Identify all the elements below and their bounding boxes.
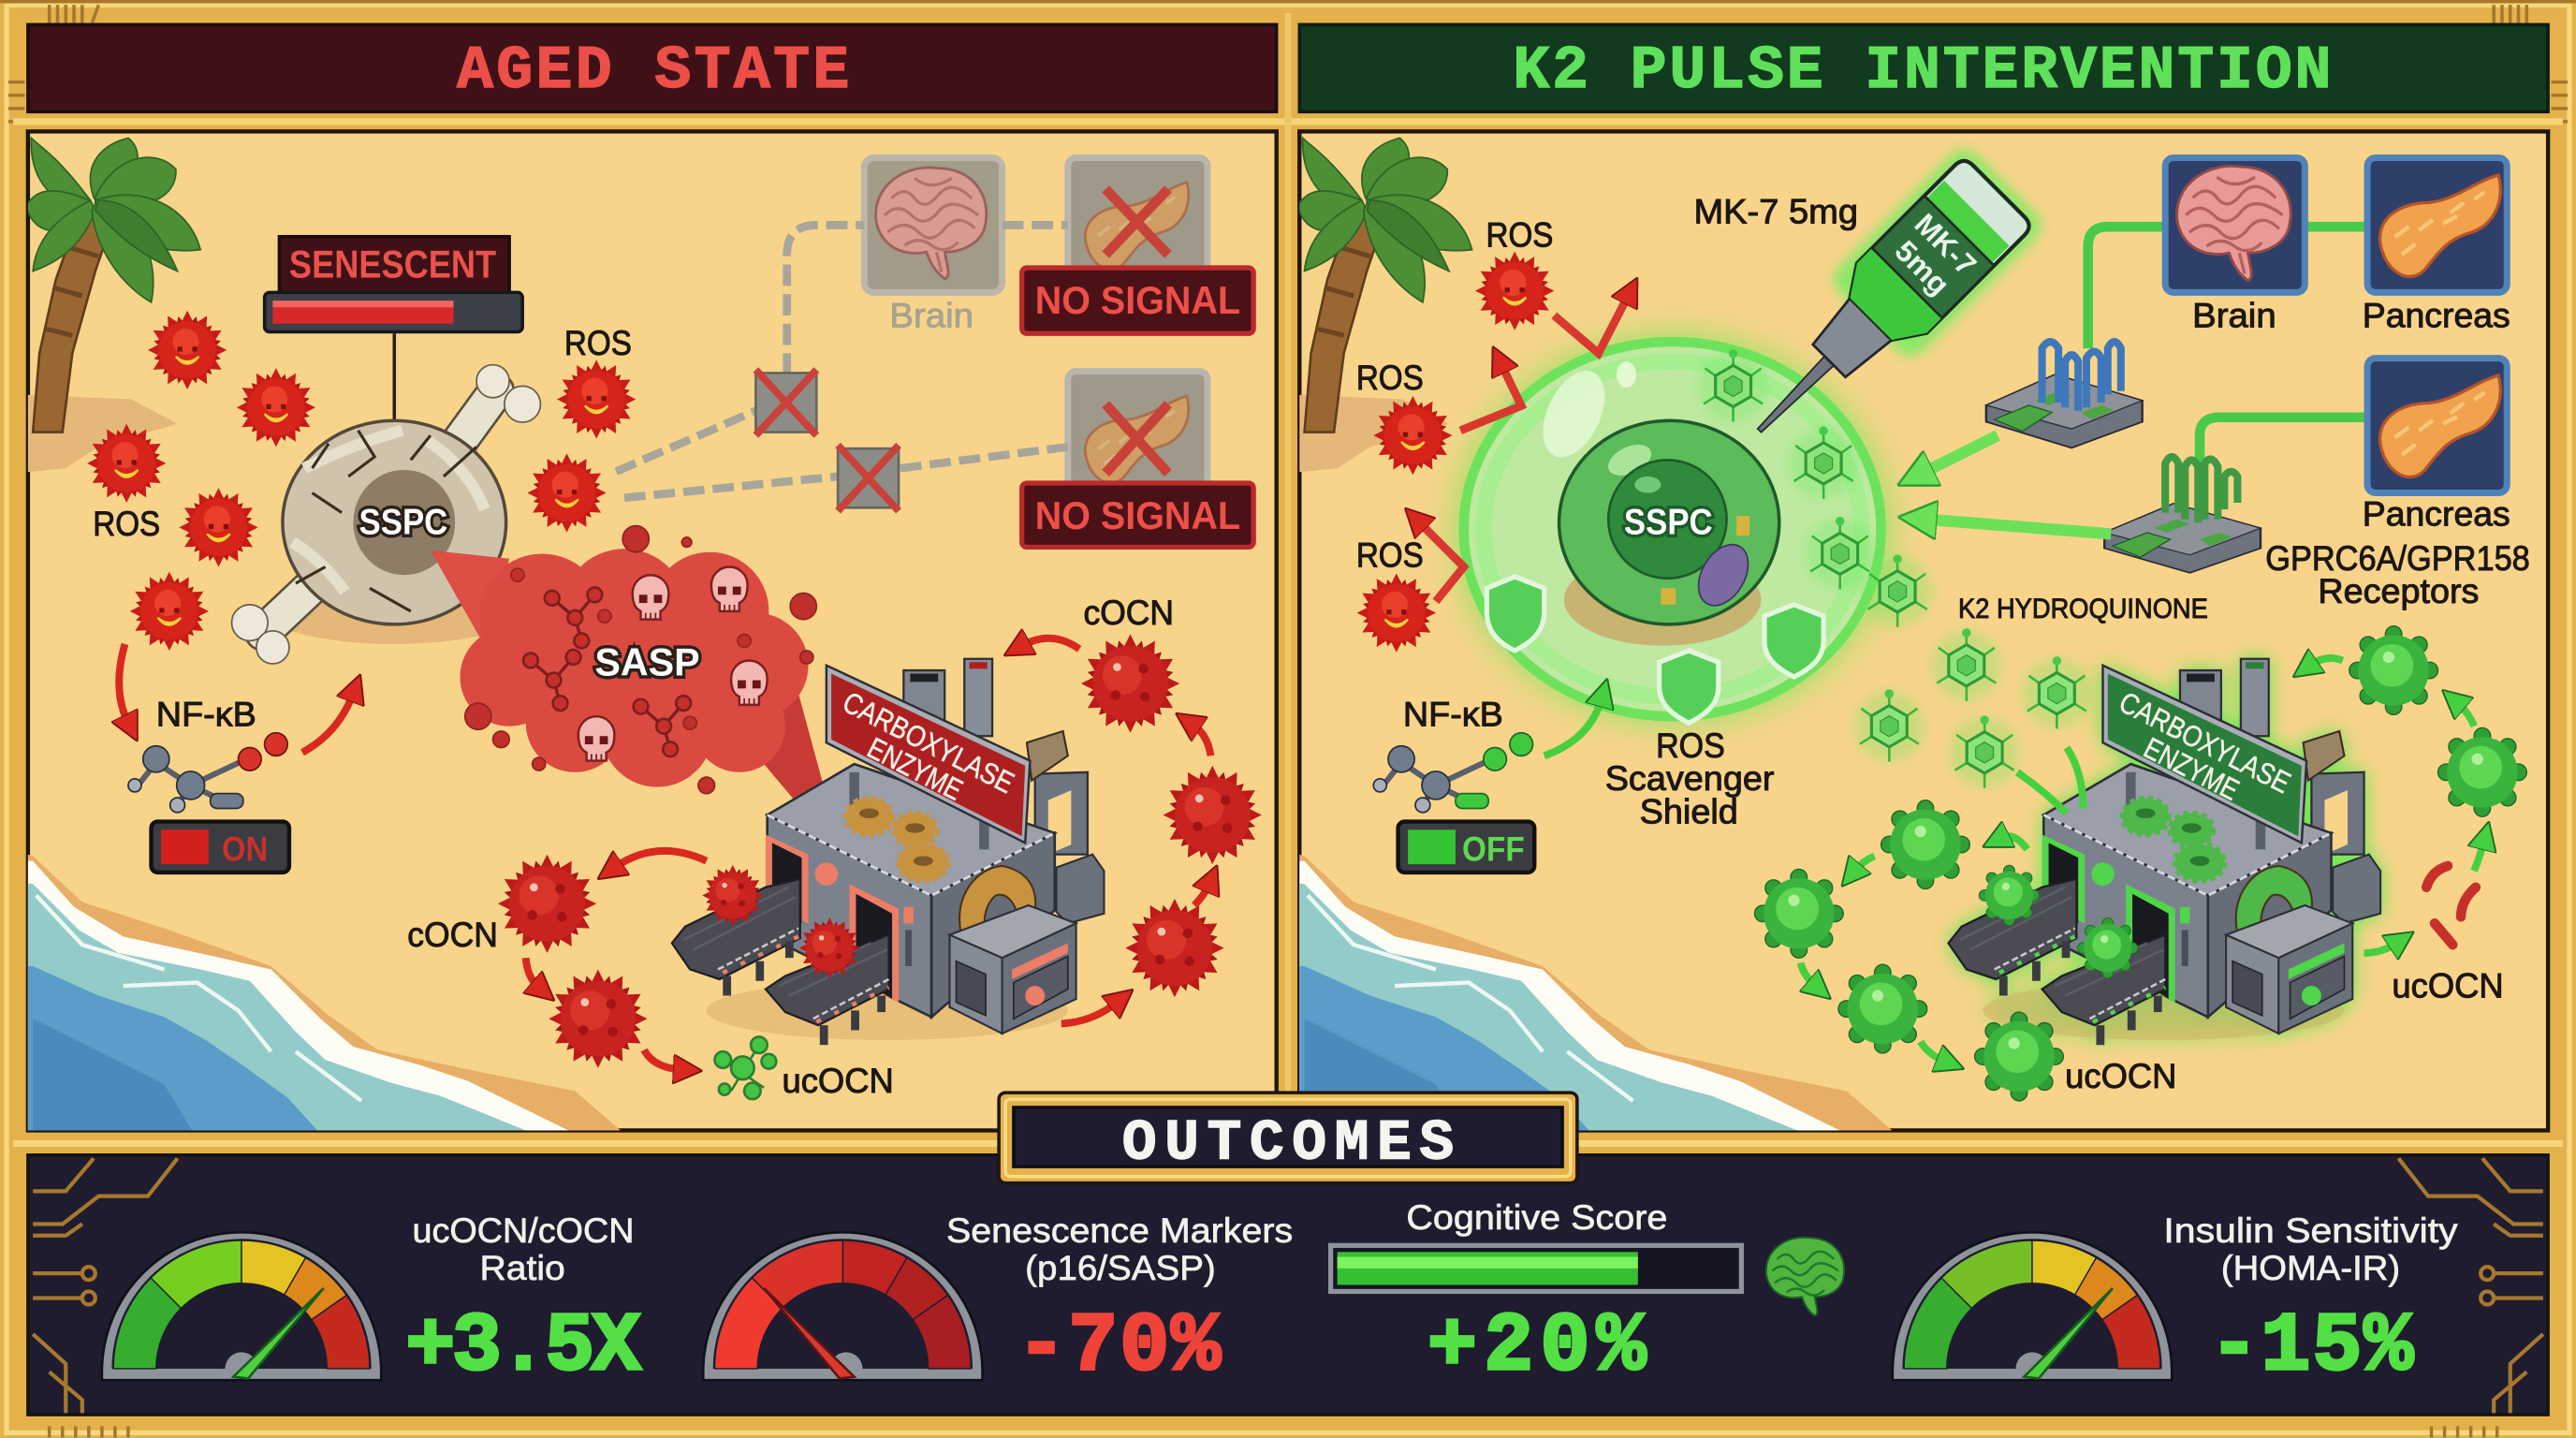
sign text aged: CARBOXYLASE xyxy=(838,684,1019,800)
header: k2 pulse intervention xyxy=(1299,24,2548,111)
brain box greyed xyxy=(864,157,1003,292)
badge: no signal top: NO SIGNAL xyxy=(1035,278,1240,322)
viruses on conveyors xyxy=(699,862,863,982)
label: ROS upper: ROS xyxy=(564,324,632,362)
green signal pipes xyxy=(2088,227,2367,468)
metric: ucOCN ratio label: ucOCN/cOCN xyxy=(413,1211,634,1250)
sign text healthy: ENZYME xyxy=(2139,730,2245,807)
panel: outcomes xyxy=(28,1155,2548,1415)
pancreas box with X, lower xyxy=(1068,372,1208,494)
SASP cloud xyxy=(431,526,829,816)
icon: green brain xyxy=(1766,1238,1844,1316)
SSPC healthy cell xyxy=(1559,420,1779,646)
outcomes badge xyxy=(999,1093,1577,1183)
metric: cognitive label: Cognitive Score xyxy=(1406,1198,1667,1237)
k2 hydroquinone molecules xyxy=(1698,349,2092,788)
switch: OFF: OFF xyxy=(1462,830,1525,869)
label: brain greyed: Brain xyxy=(889,296,973,334)
ucOCN cycle xyxy=(1754,626,2526,1101)
switch: ON xyxy=(152,822,289,873)
NF-kB off: NF-κB xyxy=(1403,696,1503,734)
SASP molecules xyxy=(523,587,691,756)
label: receptors: GPRC6A/GPR158 xyxy=(2265,539,2530,578)
badge: no signal top xyxy=(1022,268,1253,333)
pancreas box upper xyxy=(2367,157,2507,292)
SSPC healthy cell: SSPC xyxy=(1624,502,1713,542)
label: ROS scavenger shield: Scavenger xyxy=(1605,759,1774,798)
panel: aged state scene xyxy=(0,131,1277,1134)
circuit traces decoration xyxy=(33,1158,2543,1413)
skulls xyxy=(578,566,768,761)
arrow: receptor to bubble upper xyxy=(1922,435,1998,473)
label: ROS top: ROS xyxy=(1486,215,1553,254)
cOCN cycle viruses xyxy=(492,629,1266,1073)
badge: no signal lower: NO SIGNAL xyxy=(1035,493,1240,537)
receptor blue xyxy=(1986,342,2143,448)
sign text aged: ENZYME xyxy=(862,730,968,807)
SASP cloud: SASP xyxy=(594,639,700,683)
label: ROS left: ROS xyxy=(93,505,160,543)
switch: OFF xyxy=(1398,822,1534,873)
MK-7 bottle: MK-7 xyxy=(1909,207,1983,282)
gauge: ucOCN ratio xyxy=(102,1232,381,1380)
arrow: receptor to bubble lower xyxy=(1925,520,2111,534)
label: cOCN upper: cOCN xyxy=(1083,594,1174,632)
label: MK-7 5mg: MK-7 5mg xyxy=(1693,193,1858,231)
title: aged state: AGED STATE xyxy=(457,37,849,106)
label: K2 hydroquinone: K2 HYDROQUINONE xyxy=(1958,594,2208,624)
label: ROS low: ROS xyxy=(1356,536,1424,574)
ucOCN fragment xyxy=(714,1036,776,1099)
metric: insulin label: (HOMA-IR) xyxy=(2221,1249,2400,1287)
NF-kB off xyxy=(1373,696,1602,813)
SSPC bone cell: SSPC xyxy=(359,502,447,542)
gauge: insulin sensitivity xyxy=(1893,1232,2172,1380)
metric value: +20%: +20% xyxy=(1427,1301,1647,1394)
metric value: +3.5X: +3.5X xyxy=(406,1301,641,1394)
label: Pancreas lower: Pancreas xyxy=(2363,495,2510,534)
metric value: -15%: -15% xyxy=(2210,1301,2414,1394)
label: ROS scavenger shield: Shield xyxy=(1640,792,1738,830)
label: ROS scavenger shield: ROS xyxy=(1656,726,1725,765)
receptor green xyxy=(2104,457,2261,573)
heading: outcomes: OUTCOMES xyxy=(1122,1111,1454,1176)
dashed broken signal lines xyxy=(616,225,1068,498)
ROS viruses aged xyxy=(84,307,639,653)
metric: insulin label: Insulin Sensitivity xyxy=(2163,1211,2458,1250)
metric: senescence label: Senescence Markers xyxy=(946,1211,1293,1250)
label: ucOCN aged: ucOCN xyxy=(782,1062,894,1100)
pancreas box lower xyxy=(2367,359,2507,493)
label: Brain: Brain xyxy=(2192,296,2276,334)
factory aged xyxy=(672,659,1104,1045)
cycle arrows healthy xyxy=(1801,658,2484,1062)
label: receptors: Receptors xyxy=(2318,572,2479,610)
label: Pancreas upper: Pancreas xyxy=(2363,296,2510,334)
header: aged state xyxy=(28,24,1277,111)
label: ucOCN lower: ucOCN xyxy=(2065,1057,2176,1095)
senescent status: SENESCENT xyxy=(289,242,496,286)
protective bubble xyxy=(1453,332,1893,726)
NF-kB aged loop: NF-κB xyxy=(156,696,256,734)
beach and palm tree right xyxy=(1271,138,1895,1134)
panel: K2 pulse scene xyxy=(1271,131,2548,1134)
title: k2 pulse intervention: K2 PULSE INTERVENTION xyxy=(1513,37,2331,106)
MK-7 bottle: 5mg xyxy=(1888,233,1956,301)
brain box xyxy=(2165,157,2305,292)
pancreas box with X, top xyxy=(1068,157,1208,281)
green viruses on conveyors xyxy=(1979,865,2138,978)
progress bar: cognitive xyxy=(1331,1245,1741,1291)
SSPC bone cell xyxy=(232,365,540,664)
gauge: senescence markers xyxy=(703,1232,983,1380)
blocked node X one xyxy=(755,370,816,435)
red cOCN fragments xyxy=(2426,866,2476,945)
sign text healthy: CARBOXYLASE xyxy=(2114,684,2296,800)
label: ROS mid: ROS xyxy=(1356,359,1424,397)
factory healthy xyxy=(1949,659,2380,1045)
shields xyxy=(1486,577,1823,723)
label: cOCN lower: cOCN xyxy=(407,916,498,954)
bounce arrows xyxy=(1419,296,1628,601)
metric: ucOCN ratio label: Ratio xyxy=(480,1249,565,1287)
MK-7 bottle xyxy=(1718,142,2047,472)
senescent status xyxy=(265,237,522,424)
beach and palm tree xyxy=(0,138,624,1134)
switch: ON: ON xyxy=(222,830,268,869)
badge: no signal lower xyxy=(1022,483,1253,547)
metric value: -70%: -70% xyxy=(1017,1301,1221,1394)
NF-kB aged loop xyxy=(119,644,353,813)
cOCN cycle arrows xyxy=(526,638,1211,1070)
ROS viruses deflected xyxy=(1354,248,1558,655)
metric: senescence label: (p16/SASP) xyxy=(1025,1249,1216,1287)
blocked node X two xyxy=(838,446,899,511)
label: ucOCN right: ucOCN xyxy=(2392,966,2504,1005)
